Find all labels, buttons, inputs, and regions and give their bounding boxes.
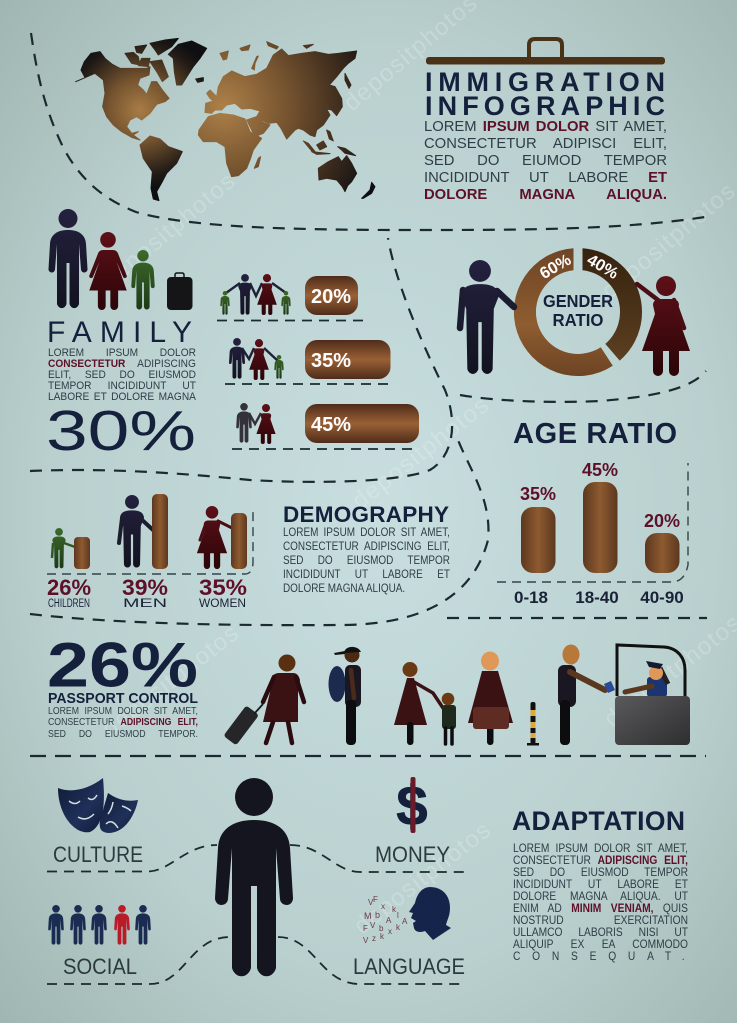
text block: NOSTRUD EXERCITATION — [513, 913, 688, 927]
stat: 30 percent: 30% — [46, 399, 196, 463]
text block: CONSECTETUR ADIPISCING — [48, 358, 196, 370]
central person — [215, 778, 293, 976]
icon: speaking head with letters: b — [379, 924, 384, 933]
text block: ULLAMCO LABORIS NISI UT — [513, 925, 688, 939]
row: 20 percent — [217, 274, 365, 320]
panel: demography — [47, 494, 451, 610]
panel: adaptation — [47, 774, 689, 984]
chart: age bars — [497, 460, 688, 607]
stats — [47, 575, 247, 610]
icon: speaking head with letters: l — [397, 911, 399, 920]
watermark: depositphotos — [349, 817, 496, 940]
label: MONEY — [375, 842, 450, 867]
panel: passport control — [47, 630, 690, 746]
label: LANGUAGE — [353, 954, 465, 979]
watermark: depositphotos — [597, 178, 737, 305]
text block — [283, 526, 451, 597]
chart: age bars: 0-18 — [514, 588, 548, 607]
icon: speaking head with letters: x — [388, 927, 392, 936]
icon: woman — [637, 276, 690, 376]
icon: suitcase bar — [426, 39, 665, 64]
heading: AGE RATIO — [513, 418, 677, 450]
text block — [48, 706, 199, 742]
text block — [48, 348, 198, 405]
icon: speaking head with letters: k — [392, 905, 397, 914]
icon: man — [460, 260, 514, 374]
text block: INCIDIDUNT UT LABORE ET — [424, 170, 667, 186]
heading: ADAPTATION — [512, 806, 685, 836]
icon: speaking head with letters: k — [380, 932, 385, 941]
label: CULTURE — [53, 842, 143, 867]
icon: speaking head with letters: V — [370, 921, 376, 930]
text block: TEMPOR INCIDIDUNT UT — [48, 380, 196, 392]
heading — [425, 67, 665, 121]
watermark: depositphotos — [97, 620, 244, 743]
heading: INFOGRAPHIC — [425, 91, 665, 121]
text block: SED DO EIUSMOD TEMPOR. — [48, 728, 198, 740]
chart: age bars: 35% — [520, 484, 556, 504]
icon: speaking head with letters: b — [375, 910, 380, 920]
panel: family — [46, 209, 198, 463]
panel: gender ratio — [460, 248, 690, 376]
stat: 26% — [47, 630, 198, 700]
row: 35 percent: 35% — [311, 350, 351, 372]
text block: ALIQUIP EX EA COMMODO — [513, 937, 688, 951]
label: GENDER — [543, 291, 613, 311]
chart: demography figures — [47, 494, 253, 574]
row: 20 percent: 20% — [311, 286, 351, 308]
text block: LOREM IPSUM DOLOR SIT AMET, — [283, 527, 450, 539]
text block: CONSECTETUR ADIPISCI ELIT, — [424, 136, 667, 152]
stats: 26% — [47, 575, 91, 600]
heading: DEMOGRAPHY — [283, 502, 449, 527]
watermark — [97, 0, 737, 940]
icon: speaking head with letters: V — [363, 936, 369, 945]
stats: 35% — [199, 575, 247, 600]
text block: DOLORE MAGNA ALIQUA. — [424, 187, 667, 203]
queue: man at desk — [558, 644, 615, 745]
watermark: depositphotos — [347, 392, 494, 515]
chart: donut — [514, 248, 642, 376]
world map — [76, 38, 375, 201]
icon: speaking head with letters: A — [402, 917, 408, 926]
booth with officer — [615, 645, 690, 745]
label: SOCIAL — [63, 954, 137, 979]
icon: speaking head with letters: x — [381, 902, 385, 911]
text block: SED DO EIUSMOD TEMPOR — [513, 865, 688, 879]
row: 45 percent: 45% — [311, 414, 351, 436]
text block: LABORE ET DOLORE MAGNA — [48, 391, 196, 403]
chart: donut: 60% — [537, 251, 575, 283]
text block: CONSECTETUR ADIPISCING ELIT, — [513, 853, 688, 867]
row: 45 percent — [232, 403, 419, 449]
text block: SED DO EIUMOD TEMPOR — [424, 153, 667, 169]
heading: FAMILY — [47, 316, 192, 349]
icon: speaking head with letters: M — [364, 911, 372, 921]
icon: speaking head with letters — [363, 887, 451, 945]
icon: speaking head with letters: z — [372, 934, 376, 943]
queue: woman with child — [394, 662, 456, 745]
connectors — [47, 845, 465, 984]
heading: PASSPORT CONTROL — [48, 690, 198, 707]
panel: title — [424, 39, 668, 205]
chart: age bars: 45% — [582, 460, 618, 480]
icon: theatre masks — [58, 778, 138, 833]
queue: woman with bag — [468, 652, 513, 745]
text block: CONSECTETUR ADIPISCING ELIT, — [283, 541, 450, 553]
stats: WOMEN — [199, 598, 246, 610]
dashed route lines — [30, 33, 707, 756]
row: 35 percent — [225, 338, 393, 384]
text block: DOLORE MAGNA ALIQUA. UT — [513, 889, 688, 903]
stats: 39% — [122, 575, 168, 600]
label — [543, 291, 613, 330]
text block: CONSECTETUR ADIPISCING ELIT, — [48, 716, 198, 728]
chart: age bars: 40-90 — [640, 588, 684, 607]
stats: MEN — [123, 598, 167, 610]
icon: barrier post — [527, 702, 539, 746]
icon: speaking head with letters: A — [386, 916, 392, 925]
chart: donut: 40% — [584, 251, 622, 283]
heading: IMMIGRATION — [425, 67, 665, 97]
stats: CHILDREN — [48, 598, 90, 610]
queue: man with backpack — [328, 647, 361, 745]
icon: speaking head with letters: V — [368, 898, 374, 907]
text block: DOLORE MAGNA ALIQUA. — [283, 583, 405, 595]
panel: family size bars — [217, 274, 419, 449]
panel: age ratio — [497, 418, 688, 607]
icon: speaking head with letters: F — [373, 895, 378, 904]
text block: INCIDIDUNT UT LABORE ET — [513, 877, 688, 891]
chart: age bars: 18-40 — [575, 588, 619, 607]
queue: woman with suitcase — [223, 654, 304, 745]
icon: family figures — [48, 209, 193, 310]
text block: ELIT, SED DO EIUSMOD — [48, 369, 196, 381]
text block — [424, 119, 668, 205]
text block — [513, 842, 689, 964]
icon: dollar: $ — [396, 774, 428, 837]
watermark: depositphotos — [97, 168, 240, 295]
text block: LOREM IPSUM DOLOR SIT AMET, — [424, 119, 667, 135]
text block: INCIDIDUNT UT LABORE ET — [283, 569, 450, 581]
text block: SED DO EIUSMOD TEMPOR — [283, 555, 450, 567]
text block: ENIM AD MINIM VENIAM, QUIS — [513, 901, 688, 915]
icon: speaking head with letters: F — [363, 924, 368, 933]
icon: speaking head with letters: k — [396, 923, 401, 932]
chart: age bars: 20% — [644, 511, 680, 531]
label: RATIO — [552, 310, 604, 330]
icon: social group — [48, 905, 151, 945]
